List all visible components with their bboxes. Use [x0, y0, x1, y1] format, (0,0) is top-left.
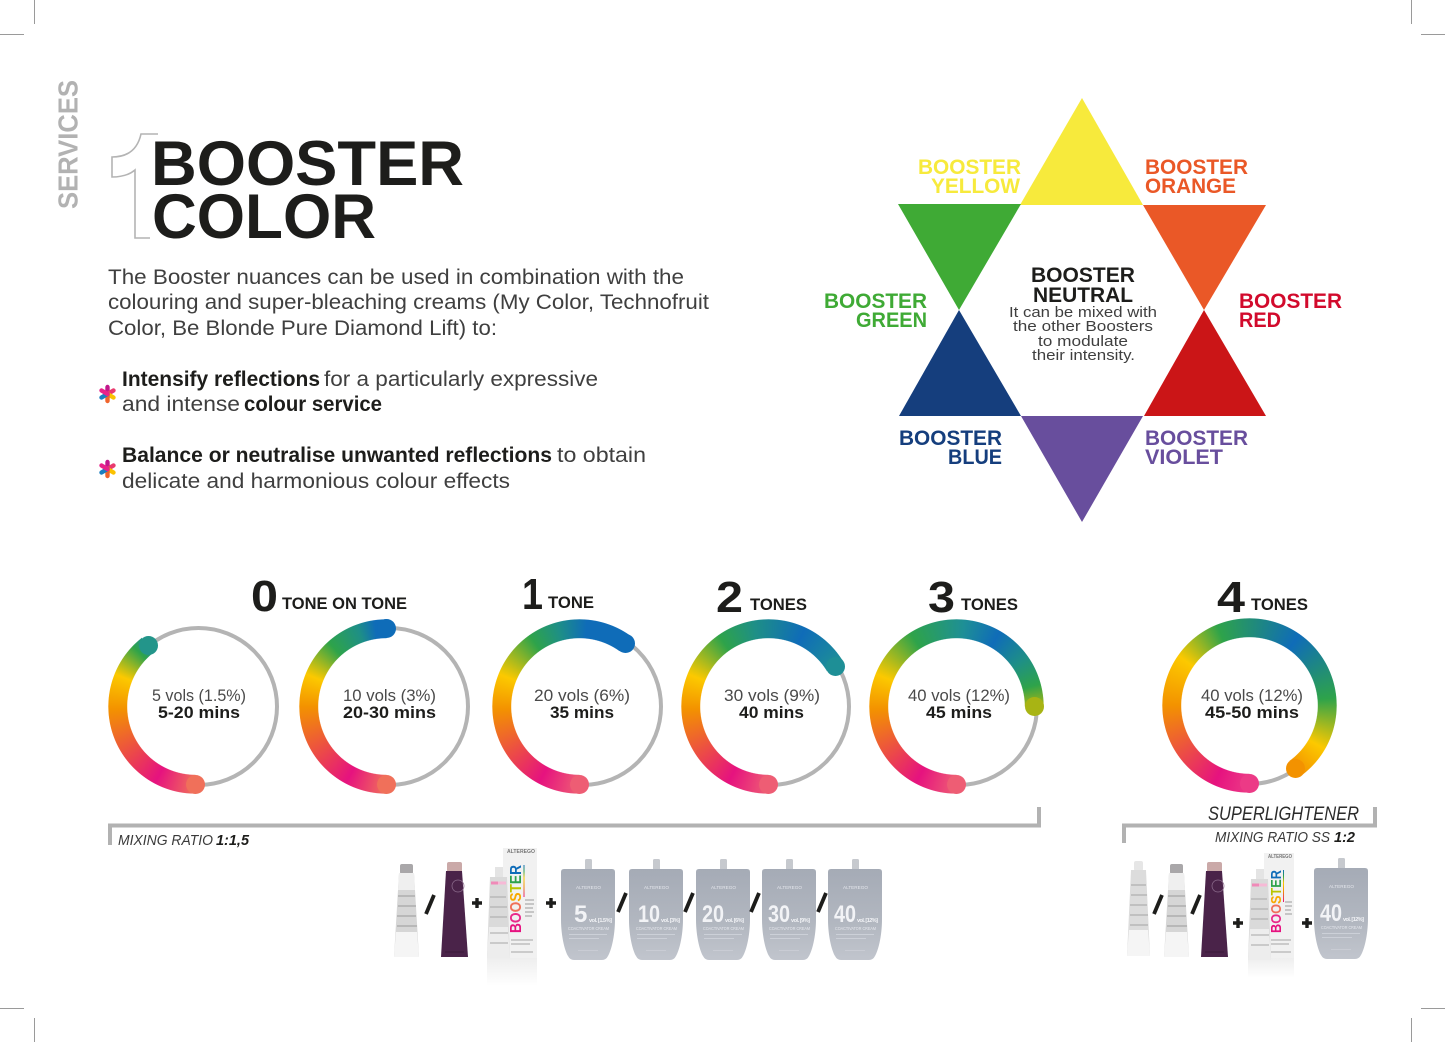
bullet 2 — [102, 444, 646, 493]
activator pouch: 10 vol: ALTEREGO — [644, 885, 670, 890]
activator pouch: 10 vol: COACTIVATOR CREAM — [636, 926, 677, 931]
heading: 0 tone on tone: TONE ON TONE — [282, 594, 407, 613]
activator pouch: 10 vol: vol. [3%] — [661, 918, 680, 924]
heading: 0 tone on tone: 0 — [251, 572, 278, 621]
ring: 40 vols: 45 mins — [926, 704, 992, 722]
activator pouch: 30 vol: vol. [9%] — [791, 918, 810, 924]
activator pouch: 40 vol: COACTIVATOR CREAM — [835, 926, 876, 931]
triangle: red — [1144, 310, 1266, 416]
label: booster blue: BOOSTER — [899, 426, 1002, 450]
label: booster yellow — [918, 155, 1021, 198]
intro text: The Booster nuances can be used in combination with the — [108, 266, 684, 289]
bullet 1: and intense — [122, 393, 240, 416]
label: booster violet: BOOSTER — [1145, 426, 1248, 450]
activator pouch: 40 vol: 40 — [1320, 900, 1342, 927]
plus — [1233, 918, 1243, 928]
activator pouch: 5 vol: 5 — [574, 901, 587, 928]
activator pouch: 20 vol: ALTEREGO — [711, 885, 737, 890]
activator pouch: 10 vol: 10 — [638, 901, 660, 928]
ring: 10 vols: 20-30 mins — [343, 704, 436, 722]
slash — [818, 893, 826, 912]
slash — [1154, 895, 1162, 914]
activator pouch: 40 vol: ALTEREGO — [843, 885, 869, 890]
activator pouch: 40 vol: 40 — [834, 901, 856, 928]
triangle: green — [898, 204, 1021, 310]
plus — [1302, 918, 1312, 928]
intro text: colouring and super-bleaching creams (My Color, Technofruit — [108, 291, 709, 314]
plus — [472, 898, 482, 908]
bracket: mixing ratio 1:1,5 — [110, 807, 1039, 849]
title with outlined numeral — [112, 129, 464, 252]
ring: 40 vols superlightener — [1162, 618, 1337, 793]
heading: 4 tones: 4 — [1217, 573, 1246, 622]
intro text: Color, Be Blonde Pure Diamond Lift) to: — [108, 317, 497, 340]
label: booster yellow: YELLOW — [931, 174, 1021, 198]
activator pouch: 5 vol: vol. [1.5%] — [589, 918, 612, 924]
product: purple tube — [1201, 862, 1228, 957]
activator pouch: 20 vol — [696, 859, 750, 960]
bracket: mixing ratio 1:1,5: 1:1,5 — [216, 832, 250, 849]
bullet 1: colour service — [244, 393, 382, 416]
ring: 20 vols — [492, 619, 663, 794]
ring: 40 vols superlightener: 45-50 mins — [1205, 704, 1299, 722]
ring: 30 vols: 40 mins — [739, 704, 804, 722]
label: booster blue: BLUE — [948, 445, 1002, 469]
label: booster yellow: BOOSTER — [918, 155, 1021, 179]
label: booster green: GREEN — [856, 308, 927, 332]
bracket: superlightener: 1:2 — [1334, 829, 1356, 846]
label: booster neutral: their intensity. — [1032, 347, 1135, 364]
activator pouch: 40 vol: vol. [12%] — [857, 918, 878, 924]
product: booster box: ALTEREGO — [1268, 854, 1292, 860]
product: booster box: BOOSTER — [1268, 870, 1285, 933]
bullet 2: Balance or neutralise unwanted reflections — [122, 444, 552, 467]
bullet 1 — [102, 368, 598, 416]
triangle: yellow — [1020, 98, 1143, 205]
triangle: violet — [1021, 416, 1143, 522]
product: colour tube — [1164, 864, 1189, 957]
slash — [751, 893, 759, 912]
heading: 1 tone: TONE — [548, 593, 594, 612]
slash — [685, 893, 693, 912]
ring: 30 vols — [681, 619, 851, 794]
activator pouch: 40 vol — [1314, 858, 1368, 959]
bracket: superlightener: SUPERLIGHTENER — [1208, 804, 1359, 825]
activator pouch: 40 vol — [828, 859, 882, 960]
activator pouch: 40 vol: ALTEREGO — [1329, 884, 1355, 889]
ring: 40 vols: 40 vols (12%) — [908, 687, 1010, 705]
heading: 3 tones: 3 — [928, 573, 955, 622]
label: booster violet — [1145, 426, 1248, 469]
product: purple tube — [441, 862, 468, 957]
heading: 2 tones: 2 — [716, 573, 743, 622]
activator pouch: 10 vol — [629, 859, 683, 960]
activator pouch: 40 vol: vol. [12%] — [1343, 917, 1364, 923]
product: white tube — [1127, 861, 1150, 956]
ring: 40 vols — [869, 619, 1044, 794]
activator pouch: 30 vol: 30 — [768, 901, 790, 928]
product: booster box — [487, 848, 537, 986]
label: booster orange: BOOSTER — [1145, 155, 1248, 179]
label: booster neutral: BOOSTER — [1031, 263, 1135, 287]
title with outlined numeral: COLOR — [152, 182, 376, 252]
heading: 4 tones — [1217, 573, 1308, 622]
bracket: mixing ratio 1:1,5: MIXING RATIO — [118, 832, 213, 849]
heading: 4 tones: TONES — [1251, 595, 1308, 614]
bracket: superlightener — [1124, 804, 1375, 846]
ring: 5 vols — [108, 626, 279, 794]
activator pouch: 20 vol: COACTIVATOR CREAM — [703, 926, 744, 931]
intro text — [108, 266, 709, 340]
slash — [1192, 895, 1200, 914]
ring: 40 vols superlightener: 40 vols (12%) — [1201, 687, 1303, 705]
activator pouch: 5 vol: COACTIVATOR CREAM — [568, 926, 609, 931]
heading: 2 tones — [716, 573, 807, 622]
plus — [546, 898, 556, 908]
activator pouch: 30 vol: COACTIVATOR CREAM — [769, 926, 810, 931]
product: booster box: ALTEREGO — [507, 849, 535, 855]
activator pouch: 30 vol — [762, 859, 816, 960]
label: booster red: RED — [1239, 308, 1281, 332]
bullet 2: to obtain — [557, 444, 646, 467]
label: booster green: BOOSTER — [824, 289, 927, 313]
slash — [426, 895, 434, 914]
label: booster orange — [1145, 155, 1248, 198]
heading: 0 tone on tone — [251, 572, 407, 621]
activator pouch: 20 vol: vol. [6%] — [725, 918, 744, 924]
activator pouch: 5 vol: ALTEREGO — [576, 885, 602, 890]
heading: 1 tone: 1 — [522, 570, 543, 619]
product: colour tube — [394, 864, 419, 957]
ring: 20 vols: 35 mins — [550, 704, 614, 722]
title with outlined numeral: BOOSTER — [151, 129, 464, 199]
label: booster neutral: the other Boosters — [1013, 318, 1153, 335]
products: superlightener row — [1127, 853, 1368, 978]
activator pouch: 5 vol — [561, 859, 615, 960]
colour star diagram — [824, 98, 1342, 522]
triangle: blue — [899, 310, 1021, 416]
ring: 10 vols: 10 vols (3%) — [343, 687, 436, 705]
icon: rainbow asterisk — [102, 387, 114, 401]
label: booster blue — [899, 426, 1002, 469]
activator pouch: 30 vol: ALTEREGO — [777, 885, 803, 890]
triangle: orange — [1143, 205, 1266, 310]
ring: 10 vols — [299, 619, 470, 794]
ring: 5 vols: 5 vols (1.5%) — [152, 687, 246, 705]
bracket: superlightener: MIXING RATIO SS — [1215, 829, 1330, 846]
ring: 5 vols: 5-20 mins — [158, 704, 240, 722]
icon: rainbow asterisk — [102, 462, 114, 476]
products: main row — [394, 848, 882, 986]
product: booster box — [1248, 853, 1294, 978]
label: booster orange: ORANGE — [1145, 174, 1236, 198]
bullet 2: delicate and harmonious colour effects — [122, 470, 510, 493]
label: booster neutral: NEUTRAL — [1033, 283, 1133, 307]
bullet 1: for a particularly expressive — [324, 368, 598, 391]
slash — [618, 893, 626, 912]
label: booster green — [824, 289, 927, 332]
activator pouch: 20 vol: 20 — [702, 901, 724, 928]
heading: 2 tones: TONES — [750, 595, 807, 614]
label: booster red — [1239, 289, 1342, 332]
heading: 3 tones — [928, 573, 1018, 622]
ring: 30 vols: 30 vols (9%) — [724, 687, 820, 705]
product: booster box: BOOSTER — [508, 865, 525, 933]
label: booster neutral: to modulate — [1038, 333, 1128, 350]
label: booster neutral: It can be mixed with — [1009, 304, 1157, 321]
label: booster neutral — [1009, 263, 1157, 364]
heading: 1 tone — [522, 570, 594, 619]
heading: 3 tones: TONES — [961, 595, 1018, 614]
section label: services: SERVICES — [52, 80, 84, 209]
bullet 1: Intensify reflections — [122, 368, 320, 391]
ring: 20 vols: 20 vols (6%) — [534, 687, 630, 705]
label: booster violet: VIOLET — [1145, 445, 1223, 469]
activator pouch: 40 vol: COACTIVATOR CREAM — [1321, 925, 1362, 930]
label: booster red: BOOSTER — [1239, 289, 1342, 313]
